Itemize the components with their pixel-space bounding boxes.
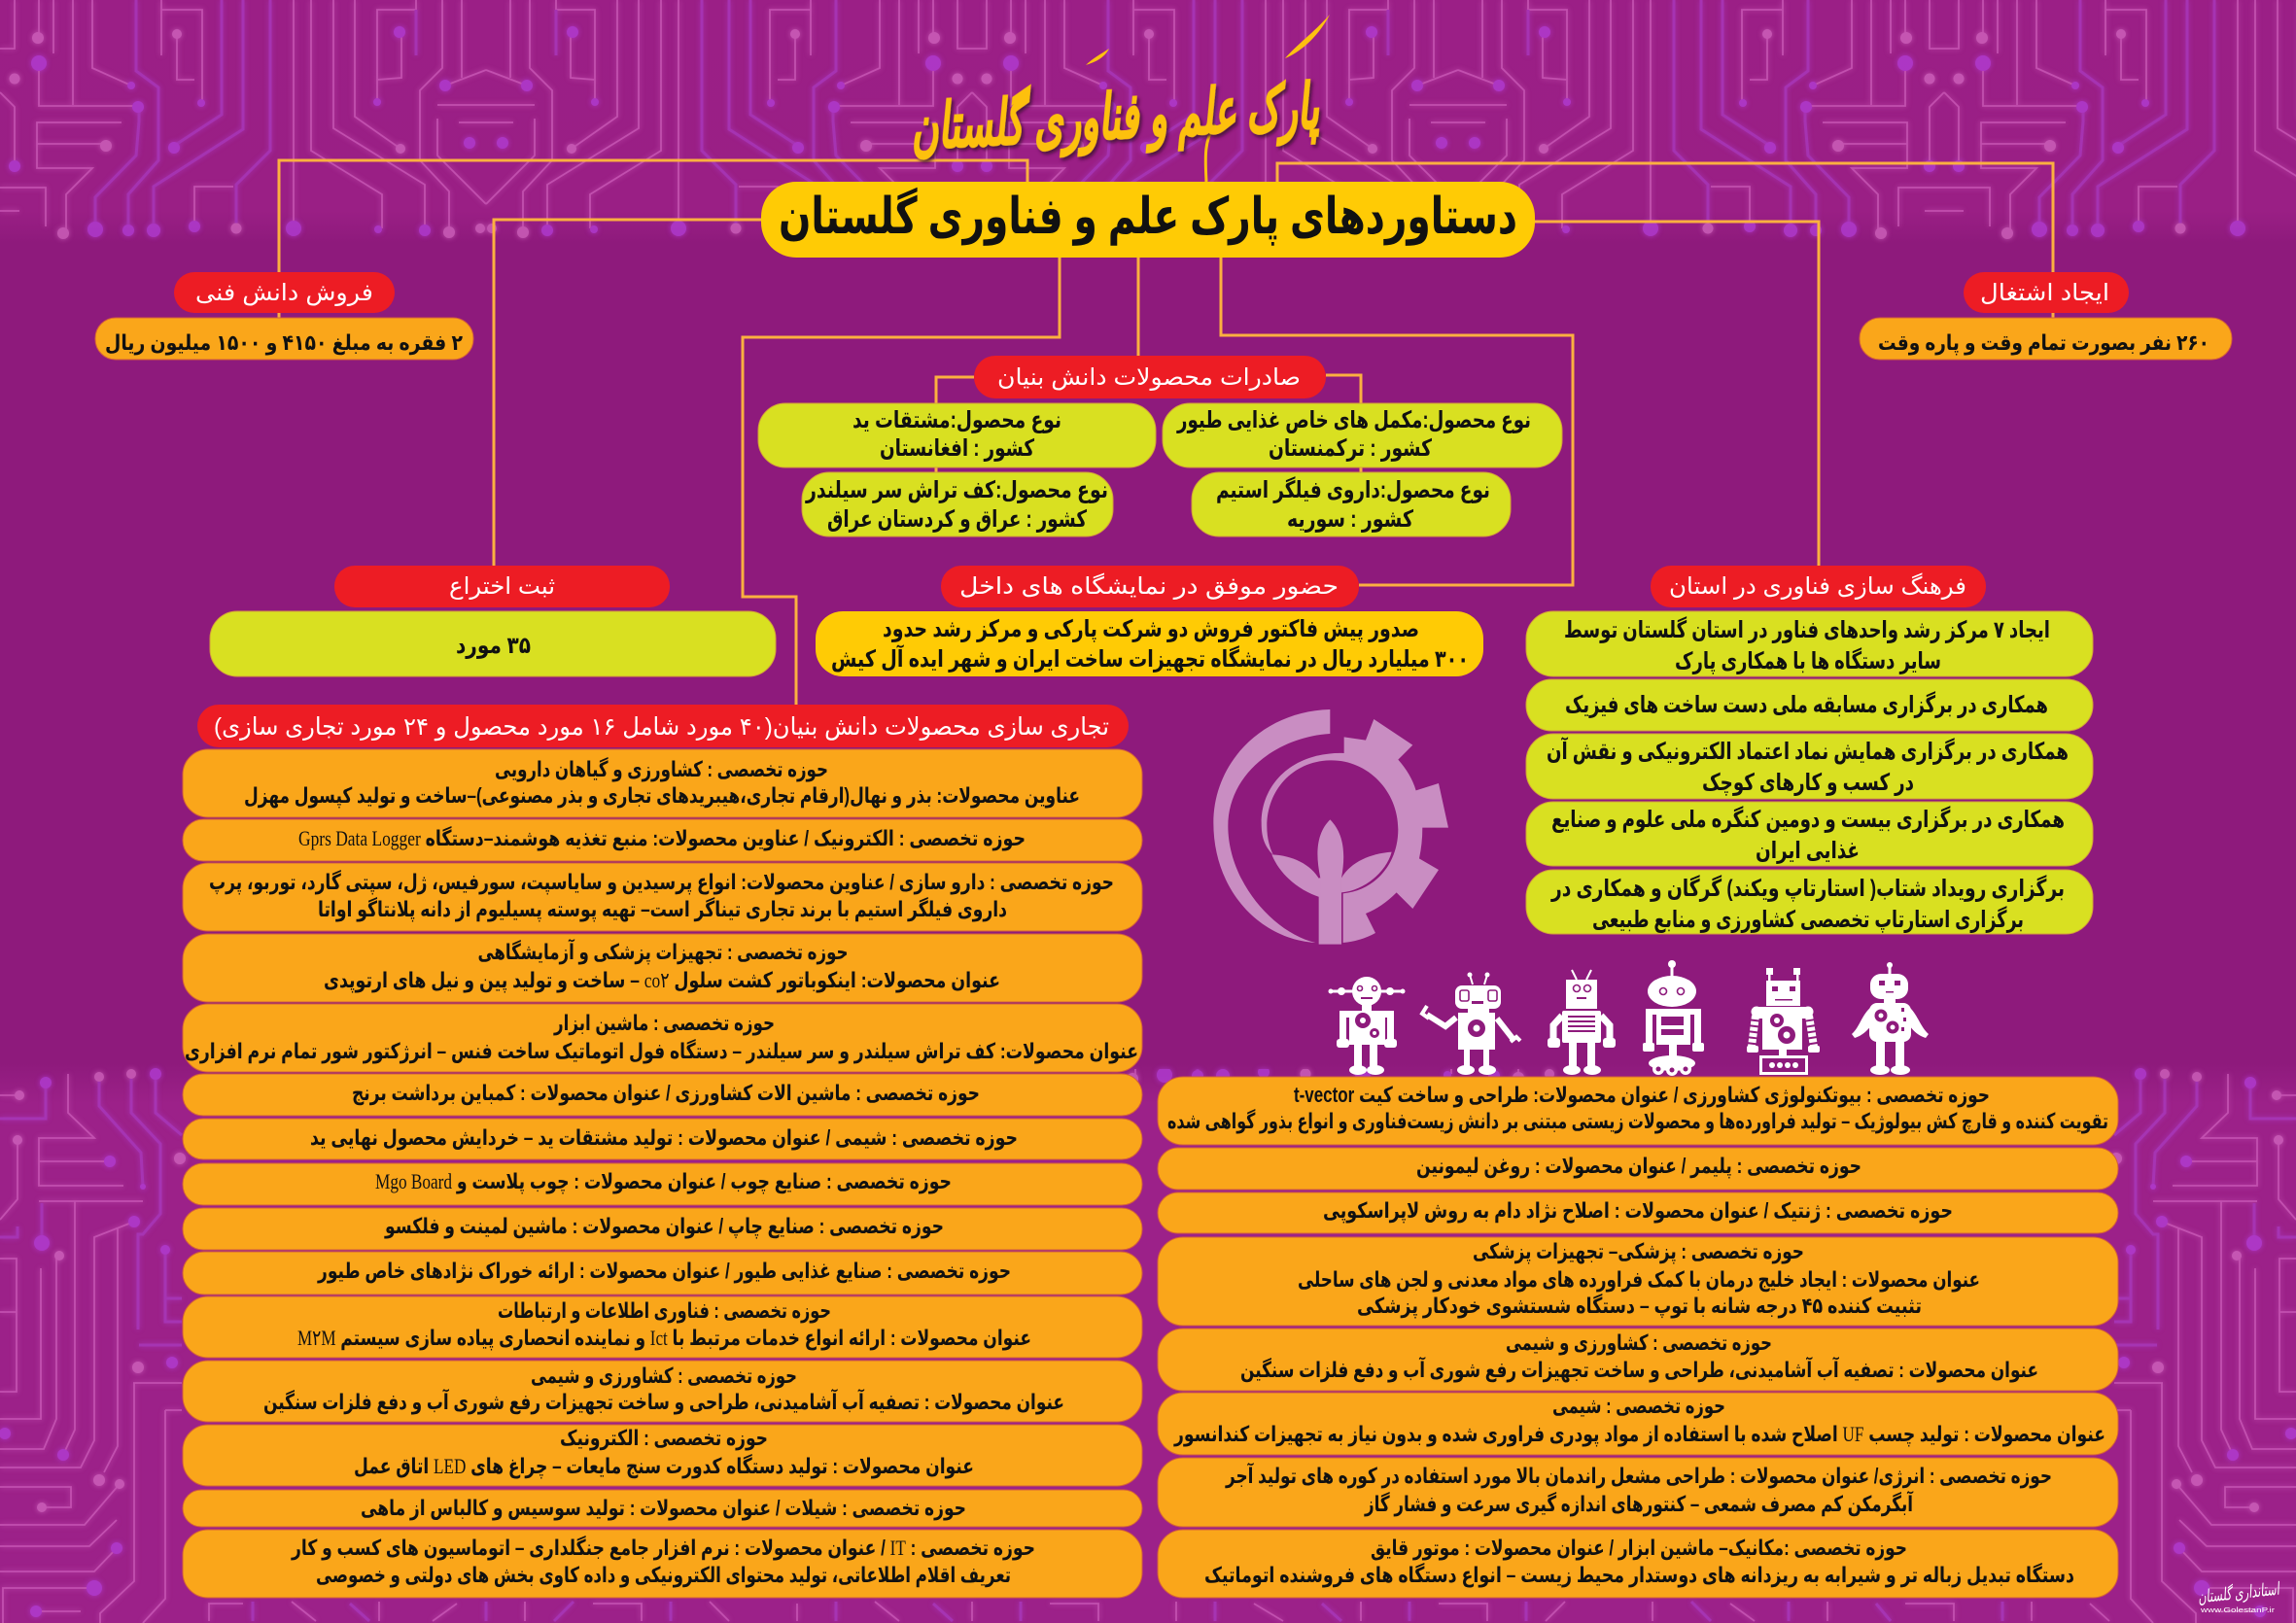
item 14: [183, 1490, 1142, 1527]
panel: technology culture: همکاری در برگزاری بیست و دومین کنگره ملی علوم و صنایع: [1551, 806, 2065, 833]
heading: commercialization: تجاری سازی محصولات دانش بنیان(۴۰ مورد شامل ۱۶ مورد محصول و ۲۴ مورد تجاری سازی): [214, 713, 1109, 742]
item 5: حوزه تخصصی : ماشین ابزار: [553, 1011, 775, 1036]
panel: exhibitions: حضور موفق در نمایشگاه های داخل: [959, 572, 1339, 600]
panel: commercialization list (left): [183, 705, 1142, 1598]
item 15: حوزه تخصصی : IT / عنوان محصولات : نرم افزار جامع جنگلداری – اتوماسیون های کسب و کار: [291, 1535, 1035, 1561]
item 5: عنوان محصولات: کف تراش سیلندر و سر سیلندر – دستگاه فول اتوماتیک ساخت فنس – انرژکتور شور تمام نرم افزاری: [185, 1038, 1138, 1064]
item R6: حوزه تخصصی : شیمی: [1552, 1394, 1725, 1419]
item 13: عنوان محصولات : تولید دستگاه کدورت سنج مایعات – چراغ های LED اتاق عمل: [354, 1453, 974, 1479]
panel: commercialization list (right): [1158, 1077, 2118, 1598]
item 9: [183, 1208, 1142, 1250]
main heading pill: دستاوردهای پارک علم و فناوری گلستان: [779, 187, 1517, 246]
item 1: [183, 749, 1142, 817]
icon: robot 4: [1643, 960, 1704, 1076]
icon: park logo: [1213, 709, 1448, 945]
panel: knowledge-based exports: کشور : ترکمنستان: [1269, 435, 1432, 462]
heading: commercialization: [197, 705, 1129, 747]
icon: robot 3: [1548, 970, 1616, 1075]
item 11: عنوان محصولات : ارائه انواع خدمات مرتبط با Ict و نماینده انحصاری پیاده سازی سیستم M۲M: [297, 1326, 1031, 1351]
item 14: حوزه تخصصی : شیلات / عنوان محصولات : تولید سوسیس و کالباس از ماهی: [361, 1496, 966, 1521]
item 1: عناوین محصولات: بذر و نهال(ارقام تجاری،هیبریدهای تجاری و بذر مصنوعی)–ساخت و تولید کپسول مهزل: [244, 783, 1080, 809]
item R5: حوزه تخصصی : کشاورزی و شیمی: [1506, 1330, 1772, 1356]
item 3: حوزه تخصصی : دارو سازی / عناوین محصولات: انواع پرسیدین و سایاسپت، سورفیس، ژل، سپتی گارد، توربو، پرپ: [209, 869, 1114, 895]
item 8: [183, 1163, 1142, 1205]
panel: knowledge-based exports: [758, 356, 1562, 536]
item 5: [183, 1004, 1142, 1072]
item R4: عنوان محصولات : ایجاد خلیج درمان با کمک فراورده های مواد معدنی و لجن های ساحلی: [1298, 1267, 1980, 1293]
panel: knowledge-based exports: کشور : عراق و کردستان عراق: [827, 506, 1087, 533]
item 15: تعریف اقلام اطلاعاتی، تولید محتوای الکترونیکی و داده کاوی بخش های دولتی و خصوصی: [316, 1563, 1011, 1588]
item 4: عنوان محصولات: اینکوباتور کشت سلول co۲ – ساخت و تولید پین و نیل های ارتوپدی: [324, 968, 1000, 993]
panel: technology culture: غذایی ایران: [1756, 838, 1860, 864]
panel: exhibitions: [816, 566, 1483, 676]
icon: robot 1: [1328, 977, 1406, 1075]
item 6: حوزه تخصصی : ماشین الات کشاورزی / عنوان محصولات : کمباین برداشت برنج: [352, 1081, 980, 1106]
item 13: حوزه تخصصی : الکترونیک: [560, 1426, 768, 1451]
item R5: عنوان محصولات : تصفیه آب آشامیدنی، طراحی و ساخت تجهیزات رفع شوری آب و دفع فلزات سنگین: [1240, 1356, 2038, 1383]
panel: knowledge-based exports: نوع محصول:داروی فیلگر استیم: [1216, 476, 1490, 503]
item R1: [1158, 1077, 2118, 1145]
icon: robot 5: [1747, 968, 1820, 1075]
title calligraphy: [909, 15, 1330, 182]
panel: technology culture: برگزاری استارتاپ تخصصی کشاورزی و منابع طبیعی: [1592, 906, 2024, 933]
item R8: دستگاه تبدیل زباله تر و شیرابه به ریزدانه های دوستدار محیط زیست – انواع دستگاه های فروشنده اتوماتیک: [1204, 1562, 2074, 1588]
panel: patents: ثبت اختراع: [449, 573, 555, 600]
panel: technology culture: همکاری در برگزاری همایش نماد اعتماد الکترونیکی و نقش آن: [1547, 737, 2069, 765]
item 9: حوزه تخصصی : صنایع چاپ / عنوان محصولات : ماشین لمینت و فلکسو: [384, 1214, 944, 1239]
item 11: [183, 1296, 1142, 1358]
panel: knowledge-based exports: کشور : افغانستان: [880, 435, 1034, 462]
item R4: تثبیت کننده ۴۵ درجه شانه با توپ – دستگاه شستشوی خودکار پزشکی: [1357, 1293, 1922, 1319]
item R1: حوزه تخصصی : بیوتکنولوژی کشاورزی / عنوان محصولات: طراحی و ساخت کیت t-vector: [1294, 1083, 1990, 1108]
panel: exhibitions: ۳۰۰ میلیارد ریال در نمایشگاه تجهیزات ساخت ایران و شهر ایده آل کیش: [831, 644, 1469, 673]
item 8: حوزه تخصصی : صنایع چوب / عنوان محصولات : چوب پلاست و Mgo Board: [375, 1169, 952, 1194]
item 4: حوزه تخصصی : تجهیزات پزشکی و آزمایشگاهی: [478, 938, 848, 965]
panel: technology culture: برگزاری رویداد شتاب( استارتاپ ویکند) گرگان و همکاری در: [1550, 875, 2065, 902]
panel: technology culture: فرهنگ سازی فناوری در استان: [1669, 572, 1966, 600]
panel: job creation: ایجاد اشتغال: [1980, 280, 2109, 306]
item 3: داروی فیلگر استیم با برند تجاری تیناگر است– تهیه پوسته پسیلیوم از دانه پلانتاگو اواتا: [318, 896, 1007, 922]
item R7: آبگرمکن کم مصرف شمعی – کنتورهای اندازه گیری سرعت و فشار گاز: [1364, 1490, 1913, 1517]
panel: technology culture: همکاری در برگزاری مسابقه ملی دست ساخت های فیزیک: [1565, 691, 2048, 718]
icon: robot 6: [1852, 962, 1929, 1075]
item R3: [1158, 1192, 2118, 1233]
panel: knowledge-based exports: نوع محصول:کف تراش سر سیلندر: [805, 477, 1108, 503]
item 4: [183, 934, 1142, 1002]
item 7: [183, 1119, 1142, 1159]
panel: technology culture: در کسب و کارهای کوچک: [1702, 770, 1914, 796]
item R7: حوزه تخصصی : انرژی/ عنوان محصولات : طراحی مشعل راندمان بالا مورد استفاده در کوره های تولید آجر: [1225, 1462, 2052, 1489]
item R7: [1158, 1458, 2118, 1527]
item R2: حوزه تخصصی : پلیمر / عنوان محصولات : روغن لیمونین: [1416, 1154, 1861, 1179]
item R6: [1158, 1393, 2118, 1455]
panel: technology culture: ایجاد ۷ مرکز رشد واحدهای فناور در استان گلستان توسط: [1564, 616, 2050, 643]
item R8: حوزه تخصصی :مکانیک– ماشین ابزار / عنوان محصولات : موتور قایق: [1371, 1536, 1907, 1561]
panel: technology culture: [1526, 566, 2093, 934]
item R8: [1158, 1530, 2118, 1598]
panel: patents: ۳۵ مورد: [456, 633, 531, 659]
item 2: حوزه تخصصی : الکترونیک / عناوین محصولات: منبع تغذیه هوشمند–دستگاه Gprs Data Logger: [298, 825, 1026, 851]
item R4: [1158, 1237, 2118, 1326]
icon: robot 2: [1422, 972, 1520, 1075]
watermark: governorate logo: www.GolestanP.ir: [2200, 1607, 2276, 1614]
item 12: حوزه تخصصی : کشاورزی و شیمی: [531, 1364, 797, 1389]
panel: knowledge-based exports: نوع محصول:مشتقات ید: [852, 407, 1061, 433]
panel: knowledge sale: ۲ فقره به مبلغ ۴۱۵۰ و ۱۵۰۰ میلیون ریال: [105, 330, 463, 356]
item 13: [183, 1425, 1142, 1486]
main heading pill: [761, 182, 1535, 258]
item 7: حوزه تخصصی : شیمی / عنوان محصولات : تولید مشتقات ید – خردایش محصول نهایی ید: [310, 1125, 1018, 1151]
icon: robots group: [1328, 960, 1929, 1076]
item 3: [183, 863, 1142, 931]
item 10: [183, 1252, 1142, 1295]
panel: knowledge-based exports: نوع محصول:مکمل های خاص غذایی طیور: [1176, 407, 1531, 433]
panel: knowledge sale: فروش دانش فنی: [195, 280, 373, 306]
panel: exhibitions: صدور پیش فاکتور فروش دو شرکت پارکی و مرکز رشد حدود: [883, 616, 1419, 642]
panel: knowledge-based exports: کشور : سوریه: [1287, 506, 1413, 533]
item R6: عنوان محصولات : تولید چسب UF اصلاح شده با استفاده از مواد پودری فراوری شده و بدون نیاز به تجهیزات کندانسور: [1173, 1422, 2105, 1447]
item 2: [183, 819, 1142, 861]
item R4: حوزه تخصصی : پزشکی– تجهیزات پزشکی: [1473, 1239, 1804, 1264]
connector lines: [279, 160, 2053, 706]
item 10: حوزه تخصصی : صنایع غذایی طیور / عنوان محصولات : ارائه خوراک نژادهای خاص طیور: [317, 1259, 1011, 1284]
panel: knowledge-based exports: صادرات محصولات دانش بنیان: [997, 364, 1301, 391]
panel: technology culture: سایر دستگاه ها با همکاری پارک: [1675, 647, 1941, 674]
panel: job creation: [1860, 272, 2232, 360]
item R2: [1158, 1148, 2118, 1190]
panel: job creation: ۲۶۰ نفر بصورت تمام وقت و پاره وقت: [1878, 330, 2209, 356]
item 1: حوزه تخصصی : کشاورزی و گیاهان دارویی: [495, 756, 828, 782]
panel: patents: [210, 566, 776, 676]
watermark: governorate logo: [2197, 1578, 2281, 1614]
item R3: حوزه تخصصی : ژنتیک / عنوان محصولات : اصلاح نژاد دام به روش لاپراسکوپی: [1323, 1198, 1953, 1224]
item 11: حوزه تخصصی : فناوری اطلاعات و ارتباطات: [498, 1298, 831, 1324]
item 15: [183, 1530, 1142, 1598]
item R5: [1158, 1329, 2118, 1391]
item 12: [183, 1361, 1142, 1422]
panel: knowledge sale: [95, 272, 473, 360]
item 6: [183, 1074, 1142, 1116]
item 12: عنوان محصولات : تصفیه آب آشامیدنی، طراحی و ساخت تجهیزات رفع شوری آب و دفع فلزات سنگین: [263, 1388, 1064, 1415]
title calligraphy: پارک علم و فناوری گلستان: [909, 70, 1321, 165]
